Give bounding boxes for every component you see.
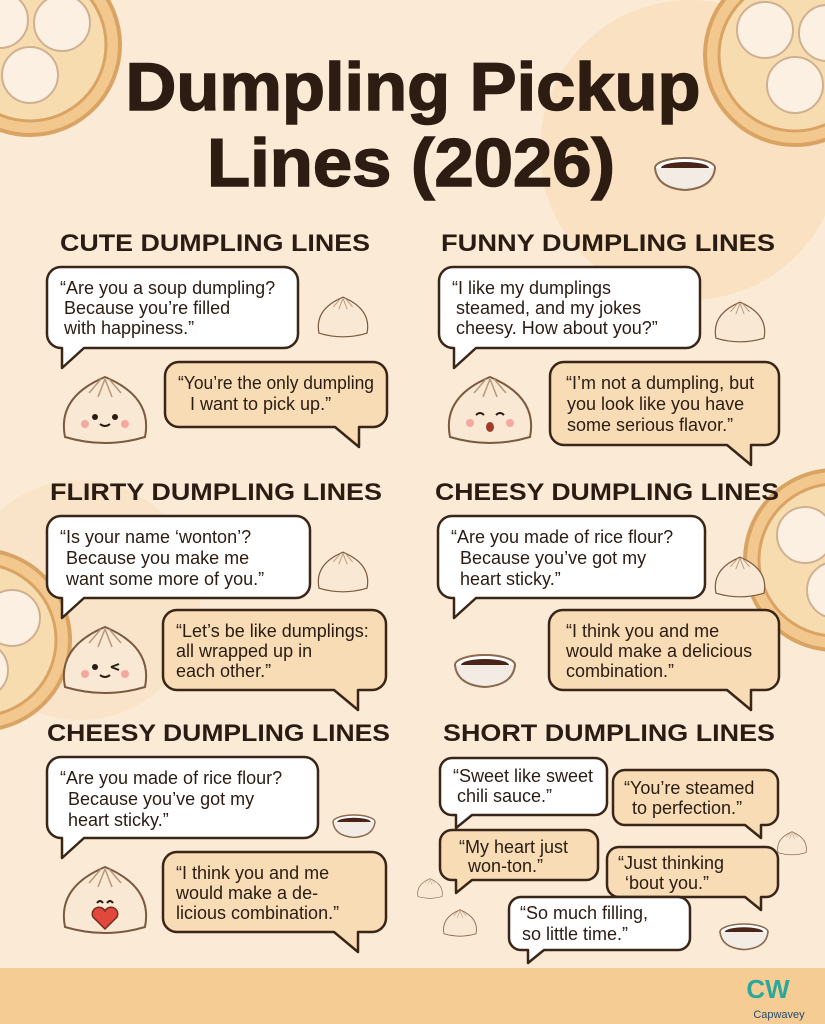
bubble: rice flour left [47,757,318,858]
heading: cute: CUTE DUMPLING LINES [60,230,370,257]
icon: sauce bowl [455,655,515,687]
panel: short lines [418,720,806,963]
heading: short: SHORT DUMPLING LINES [443,720,775,747]
bubble: only dumpling [165,362,387,447]
bubble: thinking bout you: ‘bout you.” [625,873,709,893]
bubble: sweet chili: chili sauce.” [457,786,552,806]
bubble: so much filling: so little time.” [522,924,628,944]
icon: steaming bun [318,297,368,337]
bubble: soup dumpling: “Are you a soup dumpling? [60,278,275,298]
bubble: thinking bout you [607,847,778,910]
bubble: steamed to perfection: “You’re steamed [624,778,754,798]
bubble: combination: combination.” [566,661,674,681]
heading: flirty: FLIRTY DUMPLING LINES [50,479,382,506]
icon: bun [715,557,765,597]
bubble: rice flour left: heart sticky.” [68,810,169,830]
icon: smiling dumpling [64,377,146,443]
bubble: combination: would make a delicious [565,641,752,661]
bubble: rice flour [438,516,705,618]
bubble: steamed jokes: steamed, and my jokes [456,298,641,318]
bubble: steamed to perfection [613,770,778,838]
bubble: combination: “I think you and me [566,621,719,641]
bubble: wonton: Because you make me [66,548,249,568]
panel: cheesy left [47,720,390,952]
bubble: steamed jokes: “I like my dumplings [452,278,611,298]
bubble: serious flavor: you look like you have [567,394,744,414]
bubble: soup dumpling: Because you’re filled [64,298,230,318]
bubble: won-ton [440,830,598,893]
panel: funny [439,230,779,465]
bubble: rice flour: “Are you made of rice flour? [451,527,673,547]
icon: winking dumpling [64,627,146,693]
bubble: rice flour left: “Are you made of rice flour? [60,768,282,788]
bubble: wonton [47,516,310,618]
bubble: sweet chili: “Sweet like sweet [453,766,593,786]
footer band [0,968,825,1024]
icon: sauce bowl near title [655,158,715,190]
bubble: serious flavor [550,362,779,465]
bubble: wrapped up [163,610,386,710]
bubble: thinking bout you: “Just thinking [618,853,724,873]
icons: buns and bowl [418,832,806,950]
bubble: combination [549,610,779,710]
bubble: serious flavor: “I’m not a dumpling, but [566,373,754,393]
bubble: rice flour left: Because you’ve got my [68,789,254,809]
decor: steamers [0,0,825,730]
heading: funny: FUNNY DUMPLING LINES [441,230,775,257]
title [126,49,700,201]
bubble: wrapped up: “Let’s be like dumplings: [176,621,369,641]
heading: cheesy right: CHEESY DUMPLING LINES [435,479,779,506]
bubble: combination left [163,852,386,952]
bubble: rice flour: heart sticky.” [460,569,561,589]
bubble: wrapped up: all wrapped up in [176,641,312,661]
bubble: only dumpling: “You’re the only dumpling [178,373,374,393]
bubble: only dumpling: I want to pick up.” [190,394,331,414]
panel: cheesy right [435,479,779,710]
bubble: combination left: would make a de- [175,883,318,903]
bubble: steamed jokes [439,267,700,368]
bubble: won-ton: won-ton.” [467,856,543,876]
bubble: serious flavor: some serious flavor.” [567,415,733,435]
bubble: rice flour: Because you’ve got my [460,548,646,568]
bubble: so much filling: “So much filling, [520,903,648,923]
logo: Capwavey [746,974,805,1021]
bubble: sweet chili [440,758,607,828]
bubble: steamed to perfection: to perfection.” [632,798,742,818]
bubble: so much filling [509,897,690,963]
title: Lines (2026) [207,125,615,201]
panel: flirty [47,479,386,710]
title: Dumpling Pickup [126,49,700,125]
bubble: combination left: “I think you and me [176,863,329,883]
bubble: wrapped up: each other.” [176,661,271,681]
bubble: combination left: licious combination.” [176,903,339,923]
icon: small bowl [333,815,375,837]
logo: Capwavey: Capwavey [753,1009,805,1021]
icon: heart dumpling [64,867,146,933]
bubble: won-ton: “My heart just [459,837,568,857]
logo: Capwavey: CW [746,974,790,1004]
bubble: soup dumpling: with happiness.” [63,318,194,338]
panel: cute [47,230,387,447]
bubble: steamed jokes: cheesy. How about you?” [456,318,658,338]
heading: cheesy left: CHEESY DUMPLING LINES [47,720,390,747]
bubble: wonton: want some more of you.” [65,569,264,589]
icon: bun [318,552,368,592]
bubble: wonton: “Is your name ‘wonton’? [60,527,251,547]
bubble: soup dumpling [47,267,298,368]
icon: bun [715,302,765,342]
icon: worried dumpling [449,377,531,443]
